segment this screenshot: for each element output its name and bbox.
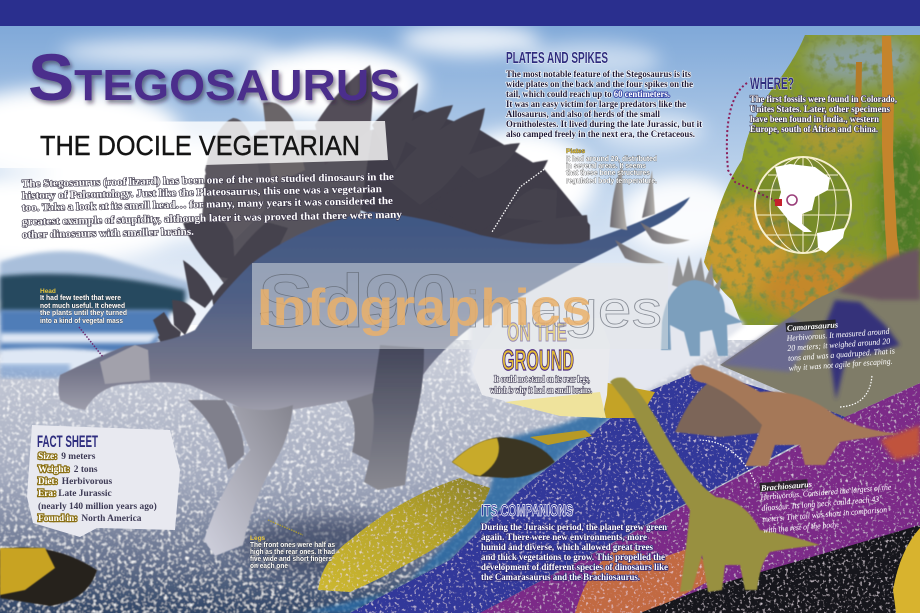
note: legs: high as the rear ones. It had <box>250 549 335 556</box>
distant mountains <box>0 251 190 300</box>
note: camarasaurus: tons and was a quadruped. That is <box>788 346 895 363</box>
panel: where: have been found in India., western <box>750 114 880 125</box>
note: plates: Plates <box>566 148 586 155</box>
head highlight <box>100 345 150 384</box>
title: STEGOSAURUS <box>28 40 400 114</box>
note: plates: that these bone structures <box>566 170 650 177</box>
camarasaurus <box>690 365 900 466</box>
panel: plates and spikes: Ornitholestes. It lived during the late Jurassic, but it <box>506 119 703 130</box>
upper stone rock <box>838 248 920 300</box>
note: plates: regulated body temperature. <box>566 178 657 185</box>
panel: plates and spikes: also camped freely in the next era, the Cretaceous. <box>506 129 695 140</box>
rock purple tone <box>720 318 815 372</box>
intro text: too. Take a look at its small head… for many, many years it was considered the <box>22 196 393 214</box>
snow behind right <box>470 265 745 400</box>
panel: its companions: ITS COMPANIONS <box>481 501 573 520</box>
intro text: greatest example of stupidity, although later it was proved that there were many <box>22 210 403 228</box>
body and tail <box>58 197 690 415</box>
panel: plates and spikes <box>506 50 703 140</box>
note: head <box>40 288 127 325</box>
plate underlayer right <box>360 110 590 255</box>
arrow: where to globe <box>727 83 778 202</box>
note: camarasaurus: Herbivorous. It measured around <box>785 327 890 343</box>
far front leg <box>188 400 244 470</box>
arrow: plates <box>492 157 561 232</box>
note: plates: It had around 20, distributed <box>566 156 657 163</box>
frozen lake <box>0 310 170 352</box>
intro text: history of Paleontology. Just like the Plateosaurus, this one was a vegetarian <box>22 184 382 202</box>
panel: fact sheet: Diet: Herbivorous <box>38 477 112 487</box>
trees <box>697 35 920 325</box>
arrow: brachiosaurus <box>698 440 755 482</box>
north america <box>775 164 830 232</box>
brachiosaurus <box>610 378 820 592</box>
far stegosaurus <box>661 255 743 356</box>
globe grid <box>756 157 850 253</box>
note: head: the plants until they turned <box>40 310 127 317</box>
note: camarasaurus: 20 meters; it weighed around 20 <box>787 337 891 353</box>
subtitle band: THE DOCILE VEGETARIAN <box>40 130 360 161</box>
yellow rocks <box>0 382 920 613</box>
panel: where <box>750 74 898 135</box>
note: legs: five wide and short fingers <box>250 556 332 563</box>
panel: on the ground: which is why it had an small brains. <box>490 385 592 396</box>
tail spikes <box>610 165 690 264</box>
near rear leg <box>364 345 424 490</box>
panel: on the ground: It could not stand on its rear legs, <box>494 374 590 385</box>
panel: on the ground: GROUND <box>502 345 574 377</box>
panel: where: Europe, south of Africa and China. <box>750 124 878 135</box>
watermark: Infographics <box>257 279 592 337</box>
intro text <box>22 172 403 241</box>
panel: plates and spikes: PLATES AND SPIKES <box>506 50 608 67</box>
panel: fact sheet <box>27 425 180 537</box>
note: camarasaurus: Camarasaurus <box>787 320 838 333</box>
tree line <box>0 274 185 312</box>
sky <box>0 25 920 325</box>
panel: plates and spikes: Allosaurus, and also of herds of the small <box>506 109 660 120</box>
panel: on the ground <box>472 317 610 418</box>
snowy ground <box>0 340 920 613</box>
watermark <box>252 259 668 349</box>
note: legs: Legs <box>250 535 266 542</box>
near front leg <box>204 405 293 556</box>
panel: fact sheet: Weight: 2 tons <box>38 465 98 475</box>
note: head: not much useful. It chewed <box>40 303 125 310</box>
note: brachiosaurus: Brachiosaurus <box>760 480 812 493</box>
ground shadow <box>240 517 420 573</box>
panel: its companions: development of different species of dinosaurs like <box>481 562 669 573</box>
note: head: It had few teeth that were <box>40 295 121 302</box>
intro text: other dinosaurs with smaller brains. <box>22 227 194 241</box>
panel: plates and spikes: The most notable feature of the Stegosaurus is its <box>506 69 691 80</box>
south america <box>817 228 845 253</box>
panel: fact sheet: Found in: North America <box>38 514 142 524</box>
panel: fact sheet: (nearly 140 million years ago) <box>38 501 157 512</box>
blue band <box>350 370 850 613</box>
arrow: camarasaurus <box>840 375 872 407</box>
panel: fact sheet: Size: 9 meters <box>38 452 96 462</box>
note: brachiosaurus: Herbivorous. Considered the largest of the <box>759 483 892 502</box>
note: head: Head <box>40 288 56 295</box>
main stegosaurus <box>58 65 690 556</box>
clouds <box>0 24 740 265</box>
note: brachiosaurus: dinosaur. Its long neck could reach 43 <box>761 495 879 513</box>
panel: where: The first fossils were found in Colorado, <box>750 94 898 105</box>
note: legs: The front ones were half as <box>250 542 335 549</box>
panel: plates and spikes: wide plates on the back and the four spikes on the <box>506 79 694 90</box>
panel: its companions: During the Jurassic period, the planet grew green <box>481 522 668 533</box>
top band <box>0 0 920 26</box>
orange sand <box>575 545 720 613</box>
torn paper <box>472 318 610 418</box>
brown rock <box>675 380 790 437</box>
panel: plates and spikes: tail, which could reach up to 60 centimeters. <box>506 89 670 100</box>
large grey rock <box>720 283 920 417</box>
black ground <box>640 525 920 613</box>
icon: globe <box>755 157 851 253</box>
note: head: into a kind of vegetal mass <box>40 318 123 325</box>
teal water <box>300 395 640 613</box>
panel: where: WHERE? <box>750 74 794 93</box>
note: camarasaurus: why it was not agile for escaping. <box>788 357 893 373</box>
rock shadow <box>825 300 900 400</box>
torn paper <box>27 425 180 537</box>
location marker <box>775 199 782 206</box>
panel: its companions <box>481 501 669 583</box>
note: legs: on each one <box>250 563 288 570</box>
panel: its companions: the Camarasaurus and the Brachiosaurus. <box>481 572 640 583</box>
note: camarasaurus <box>785 316 896 373</box>
purple band <box>480 383 920 613</box>
subtitle band <box>0 121 388 168</box>
panel: plates and spikes: It was an easy victim for large predators like the <box>506 99 687 110</box>
intro text: The Stegosaurus (roof lizard) has been one of the most studied dinosaurs in the <box>22 172 394 190</box>
arrow: legs <box>268 520 303 535</box>
panel: its companions: again. There were new environments, more <box>481 532 648 543</box>
panel: fact sheet: Era:Late Jurassic <box>38 489 112 499</box>
arrow: head <box>79 327 103 357</box>
note: brachiosaurus: with the rest of the body. <box>763 520 839 535</box>
panel: its companions: humid and diverse, which allowed great trees <box>481 542 653 553</box>
note: plates <box>566 148 657 185</box>
note: brachiosaurus <box>759 473 894 535</box>
watermark: Sd90 <box>258 259 457 343</box>
note: brachiosaurus: meters. The tail was short in comparison <box>762 505 887 524</box>
note: legs <box>250 535 335 570</box>
highlight ring <box>787 195 797 205</box>
panel: on the ground: ON THE <box>507 317 567 347</box>
panel: where: Unites States. Later, other specimens <box>750 104 890 115</box>
panel: fact sheet: FACT SHEET <box>37 432 98 451</box>
note: plates: in several areas. It seems <box>566 163 646 170</box>
far rear leg <box>335 359 390 462</box>
watermark: images <box>466 281 662 339</box>
panel: its companions: and thick vegetations to grow. This propelled the <box>481 552 666 563</box>
back plates <box>153 65 590 345</box>
plate underlayer left <box>200 130 372 285</box>
